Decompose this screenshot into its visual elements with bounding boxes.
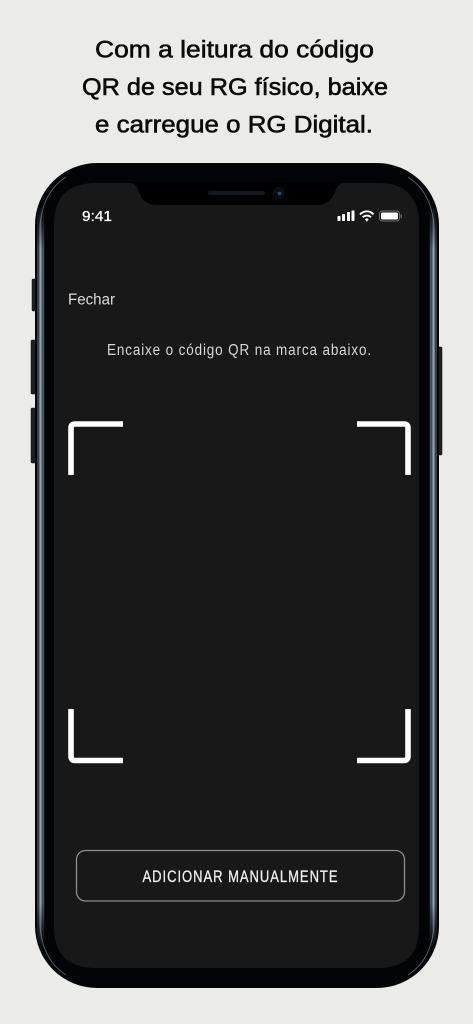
title: QR de seu RG físico, baixe bbox=[82, 74, 388, 101]
speaker bbox=[208, 191, 265, 195]
side buttons bbox=[31, 279, 442, 463]
title: Com a leitura do código bbox=[95, 36, 374, 64]
button: add manually: ADICIONAR MANUALMENTE bbox=[142, 868, 338, 886]
corner: top left bbox=[71, 424, 123, 475]
title: e carregue o RG Digital. bbox=[95, 112, 373, 138]
icon: wifi bbox=[360, 211, 374, 221]
icon: battery bbox=[380, 211, 402, 221]
camera bbox=[273, 187, 285, 199]
notch bbox=[128, 182, 345, 205]
instruction text: Encaixe o código QR na marca abaixo. bbox=[107, 342, 372, 359]
corner: bottom right bbox=[357, 709, 408, 760]
icon: cellular signal bbox=[338, 210, 354, 221]
close link: Fechar bbox=[68, 292, 115, 308]
button: add manually bbox=[76, 850, 404, 901]
title bbox=[82, 36, 388, 138]
phone body bbox=[35, 163, 439, 988]
corner: top right bbox=[357, 424, 408, 475]
status bar time: 9:41 bbox=[82, 209, 112, 225]
screen bbox=[54, 183, 419, 968]
corner: bottom left bbox=[71, 709, 123, 760]
phone mockup bbox=[31, 163, 442, 988]
metal rim highlights bbox=[38, 177, 436, 975]
scanner frame bbox=[71, 424, 408, 760]
